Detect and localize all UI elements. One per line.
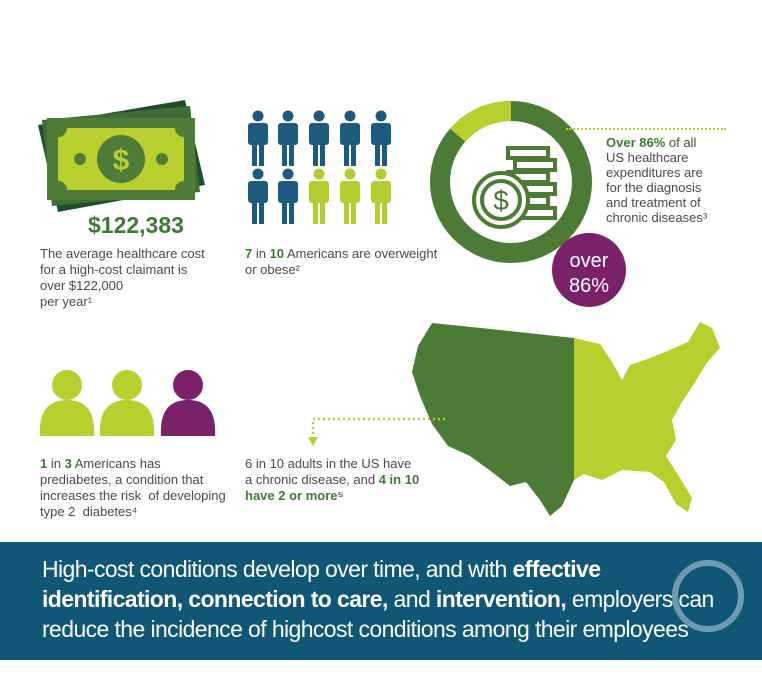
banner text <box>42 556 714 642</box>
text: 1 in 3 prediabetes: increases the risk of developing <box>40 488 226 503</box>
chart: donut 86%: $ <box>493 185 509 216</box>
heading: $122,383: $122,383 <box>88 212 184 238</box>
text: 7 in 10 overweight: 7 in 10 Americans are overweight <box>245 246 437 261</box>
banner <box>0 542 762 660</box>
badge: over 86% <box>552 233 626 307</box>
text: 6 in 10 chronic: a chronic disease, and 4 in 10 <box>245 472 419 487</box>
map: USA <box>412 322 720 516</box>
text: average healthcare cost <box>40 246 205 309</box>
text: over 86% expenditures: for the diagnosis <box>606 180 701 195</box>
text: 7 in 10 overweight <box>245 246 438 277</box>
text: 6 in 10 chronic: 6 in 10 adults in the US have <box>245 456 411 471</box>
arrow: dotted to map <box>308 418 445 446</box>
text: average healthcare cost: over $122,000 <box>40 278 123 293</box>
text: average healthcare cost: per year¹ <box>40 294 92 309</box>
text: 1 in 3 prediabetes: type 2 diabetes⁴ <box>40 504 137 519</box>
banner text: identification, connection to care, and intervention, employers can <box>42 586 714 612</box>
banner text: High-cost conditions develop over time, and with effective <box>42 556 600 582</box>
text: over 86% expenditures <box>606 135 707 225</box>
chart: donut 86% <box>430 101 626 307</box>
text: average healthcare cost: The average healthcare cost <box>40 246 205 261</box>
text: 6 in 10 chronic <box>245 456 419 503</box>
text: average healthcare cost: for a high-cost claimant is <box>40 262 187 277</box>
text: 1 in 3 prediabetes: 1 in 3 Americans has <box>40 456 161 471</box>
text: 1 in 3 prediabetes <box>40 456 226 519</box>
dotted line <box>566 128 726 130</box>
text: over 86% expenditures: US healthcare <box>606 150 688 165</box>
text: over 86% expenditures: expenditures are <box>606 165 703 180</box>
text: over 86% expenditures: chronic diseases³ <box>606 210 707 225</box>
text: 1 in 3 prediabetes: prediabetes, a condition that <box>40 472 203 487</box>
text: over 86% expenditures: Over 86% of all <box>606 135 696 150</box>
text: 7 in 10 overweight: or obese² <box>245 262 300 277</box>
badge: over 86%: over <box>570 250 609 272</box>
icon: money bills: $ <box>113 144 130 177</box>
logo watermark <box>672 560 744 632</box>
icon: 3 persons <box>40 370 216 436</box>
text: over 86% expenditures: and treatment of <box>606 195 701 210</box>
icon: 10 people <box>248 110 391 224</box>
banner text: reduce the incidence of highcost conditions among their employees <box>42 616 688 642</box>
text: 6 in 10 chronic: have 2 or more⁵ <box>245 488 344 503</box>
badge: over 86%: 86% <box>569 275 609 297</box>
icon: coin stack <box>474 148 555 227</box>
